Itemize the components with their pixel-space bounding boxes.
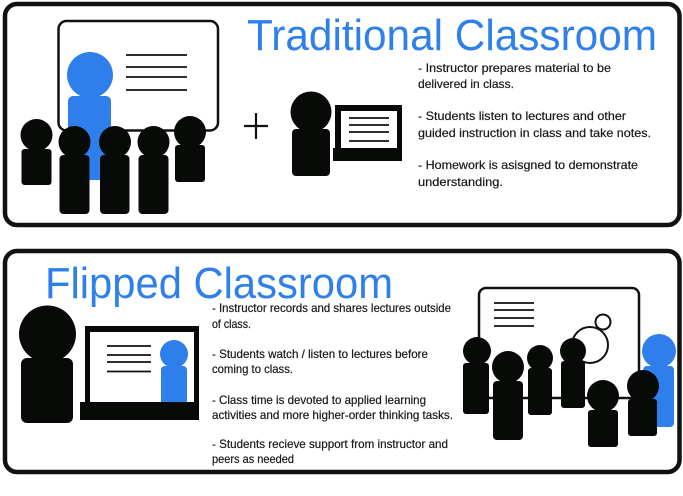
icon: blue instructor — [642, 334, 676, 427]
text: traditional classroom points: - Instructor prepares material to be — [418, 62, 611, 75]
text: traditional classroom points: - Students listen to lectures and other — [418, 110, 626, 123]
text: flipped classroom points: - Students watch / listen to lectures before — [212, 348, 428, 361]
panel border: flipped — [5, 251, 680, 472]
text: traditional classroom points: understanding. — [418, 176, 503, 189]
text: flipped classroom points: - Students recieve support from instructor and — [212, 438, 448, 451]
text: flipped classroom points: peers as needed — [212, 453, 294, 466]
text: traditional classroom points: guided instruction in class and take notes. — [418, 127, 651, 140]
text: traditional classroom points — [418, 62, 651, 189]
text: flipped classroom points: - Class time is devoted to applied learning — [212, 394, 426, 407]
text: flipped classroom points: - Instructor records and shares lectures outside — [212, 302, 451, 315]
panel border: traditional — [5, 4, 680, 225]
icon: plus sign — [244, 113, 268, 139]
text: flipped classroom points: activities and more higher-order thinking tasks. — [212, 409, 453, 422]
text: traditional classroom points: delivered in class. — [418, 78, 514, 91]
text: flipped classroom points: coming to class. — [212, 363, 293, 376]
text: flipped classroom points: of class. — [212, 318, 251, 331]
icon: student with laptop — [19, 306, 199, 423]
text: traditional classroom points: - Homework is asisgned to demonstrate — [418, 159, 638, 172]
panel: traditional classroom — [5, 4, 680, 225]
title: Flipped Classroom: Flipped Classroom — [45, 259, 393, 308]
icon: whiteboard with diagram — [479, 288, 639, 398]
title: Traditional Classroom: Traditional Classroom — [247, 11, 657, 60]
icon: students working in groups — [463, 337, 659, 447]
panel: flipped classroom — [5, 251, 680, 472]
icon: students in class — [20, 116, 206, 214]
text: flipped classroom points — [212, 302, 453, 466]
icon: whiteboard with instructor — [58, 21, 218, 180]
icon: student at computer — [290, 92, 402, 176]
